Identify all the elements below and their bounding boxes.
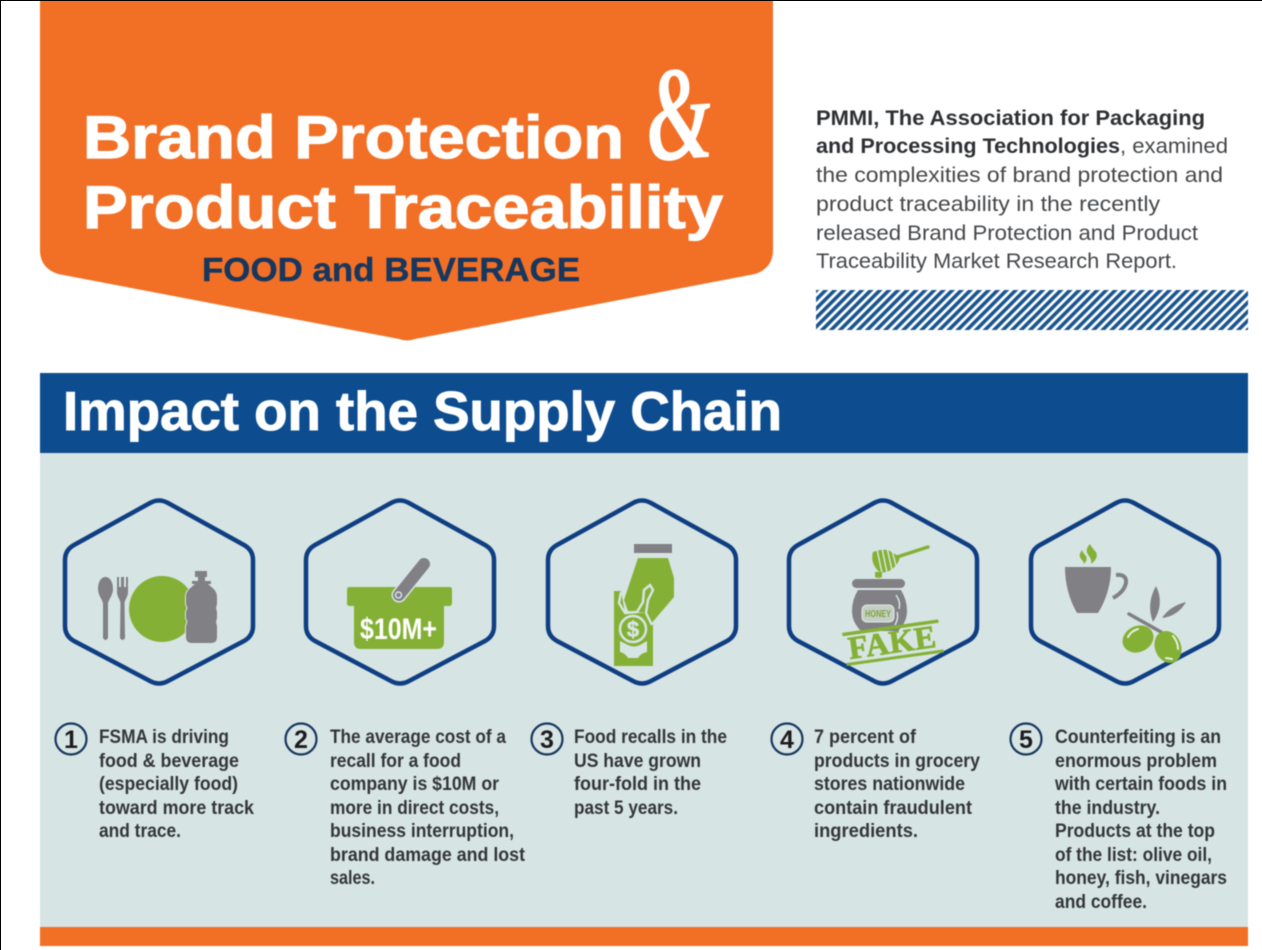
number badge 4: 4: [780, 726, 794, 754]
item 3 text: US have grown: [574, 751, 701, 772]
item 2 text: [330, 727, 526, 889]
title: Product Traceability: [83, 174, 724, 241]
item 2: [286, 724, 526, 889]
icon: bottle: [186, 571, 217, 643]
item 1 text: and trace.: [99, 821, 181, 842]
icon: dollar circle: [620, 616, 647, 658]
icon: cuff: [634, 544, 672, 553]
item 4: [772, 724, 980, 842]
number badge 5: 5: [1019, 726, 1033, 754]
subtitle: FOOD and BEVERAGE: [202, 251, 580, 288]
icon: plate: [129, 576, 195, 642]
item 5 text: honey, fish, vinegars: [1055, 868, 1227, 889]
item 2 text: sales.: [330, 868, 375, 889]
item 3: [532, 724, 727, 819]
hexagon 2: basket: [306, 500, 494, 684]
item 1 text: FSMA is driving: [99, 727, 229, 748]
icon: honey jar: HONEY: [865, 609, 891, 620]
item 5 text: [1054, 727, 1227, 913]
item 2 text: company is $10M or: [330, 774, 500, 795]
hexagon 4: fake honey: [789, 500, 977, 684]
icon: spoon: [98, 577, 113, 640]
item 3 text: Food recalls in the: [574, 727, 727, 748]
intro text: and Processing Technologies: [816, 135, 1120, 158]
item 4 text: 7 percent of: [814, 727, 917, 748]
item 5 text: Counterfeiting is an: [1055, 727, 1221, 748]
icon: banknote: [614, 591, 653, 666]
intro text: , examined: [1120, 135, 1228, 158]
item 5 text: Products at the top: [1055, 821, 1215, 842]
item 5 text: and coffee.: [1055, 892, 1147, 913]
icon: hand: [624, 558, 674, 625]
header banner: [40, 0, 773, 340]
icon: coffee cup: [1065, 567, 1126, 613]
item 4 text: [814, 727, 980, 842]
icon: olive branch: [1118, 586, 1186, 667]
hexagon 1: food and drink: [65, 500, 253, 684]
basket label: $10M+: [360, 613, 437, 646]
item 4 text: stores nationwide: [814, 774, 965, 795]
intro text: released Brand Protection and Product: [816, 222, 1198, 245]
number badge 2: [286, 724, 316, 754]
footer orange bar: [40, 927, 1248, 946]
item 1 text: (especially food): [99, 774, 238, 795]
item 2 text: business interruption,: [330, 821, 514, 842]
intro text: product traceability in the recently: [816, 193, 1161, 216]
icon: fork: [117, 577, 128, 640]
number badge 5: [1010, 724, 1042, 754]
stamp: fake: FAKE: [846, 618, 938, 666]
item 1 text: food & beverage: [99, 751, 239, 772]
title: &: [641, 38, 717, 191]
icon: honey jar: [852, 579, 907, 631]
hexagon 3: hand and money: [548, 500, 736, 684]
item 5 text: with certain foods in: [1054, 774, 1227, 795]
number badge 1: [56, 724, 86, 754]
title: Brand Protection: [83, 104, 624, 171]
intro text: [816, 107, 1228, 273]
intro text: PMMI, The Association for Packaging: [816, 107, 1205, 130]
item 5 text: enormous problem: [1055, 751, 1217, 772]
icon: basket handle: [396, 564, 424, 598]
number badge 3: [532, 724, 562, 754]
icon: steam: [1080, 544, 1097, 564]
icon: dollar circle: $: [627, 617, 639, 642]
item 2 text: The average cost of a: [330, 727, 506, 748]
item 2 text: more in direct costs,: [330, 798, 499, 819]
item 1: [56, 724, 254, 842]
hexagon 5: coffee and olives: [1031, 500, 1219, 684]
icon: basket body: [347, 587, 452, 649]
section heading band: [40, 373, 1248, 453]
intro text: Traceability Market Research Report.: [816, 250, 1177, 273]
item 1 text: toward more track: [99, 798, 254, 819]
section heading band: Impact on the Supply Chain: [63, 380, 782, 442]
item 5 text: of the list: olive oil,: [1055, 845, 1212, 866]
number badge 1: 1: [64, 726, 78, 754]
number badge 3: 3: [540, 726, 554, 754]
icon: finger outline: [619, 585, 653, 625]
item 1 text: [99, 727, 254, 842]
item 4 text: contain fraudulent: [814, 798, 973, 819]
panel: impact on the supply chain: [40, 373, 1248, 927]
title: [83, 38, 724, 241]
item 3 text: [574, 727, 727, 819]
item 4 text: ingredients.: [814, 821, 918, 842]
number badge 4: [772, 724, 802, 754]
item 3 text: four-fold in the: [574, 774, 701, 795]
icon: honey dipper: [872, 547, 928, 578]
item 3 text: past 5 years.: [574, 798, 678, 819]
item 2 text: brand damage and lost: [330, 845, 526, 866]
intro text: the complexities of brand protection and: [816, 164, 1223, 187]
number badge 2: 2: [294, 726, 308, 754]
item 5 text: the industry.: [1055, 798, 1160, 819]
item 4 text: products in grocery: [814, 751, 980, 772]
item 5: [1010, 724, 1227, 913]
item 2 text: recall for a food: [330, 751, 461, 772]
